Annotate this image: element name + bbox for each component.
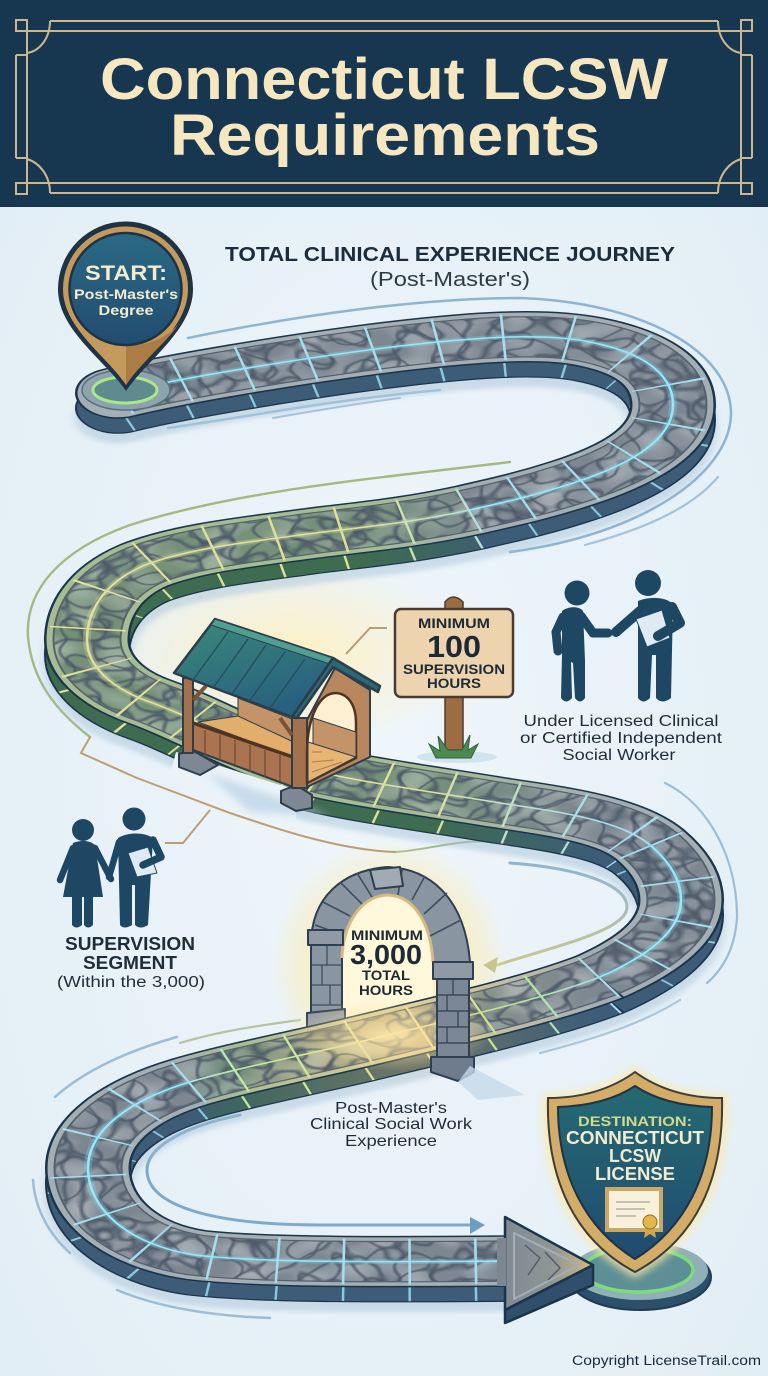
shield label: CONNECTICUT [566, 1128, 704, 1148]
stone arch gate back part [307, 867, 470, 1040]
road ground shadow [87, 361, 681, 1286]
bridge interior [238, 698, 300, 745]
warm glow behind covered bridge [100, 560, 480, 750]
3000 hours label: 3,000 [350, 939, 422, 970]
bridge ground shadow [205, 772, 330, 816]
connector from tan line to figures [165, 810, 210, 843]
3000 hours label: TOTAL [362, 968, 410, 983]
start map pin [58, 221, 193, 391]
supervisor caption: or Certified Independent [520, 730, 723, 747]
supervision hours sign [395, 597, 513, 763]
arch shadow [458, 1066, 525, 1100]
pin label: Post-Master's [74, 286, 178, 302]
glow on road through arch [285, 999, 495, 1071]
chevron pointer towards arch [483, 957, 498, 973]
pin label: Degree [98, 302, 154, 318]
supervisor caption: Social Worker [562, 747, 676, 764]
bridge foundation stones [179, 750, 218, 775]
3000 hours label: MINIMUM [351, 927, 423, 943]
winding road path [87, 337, 681, 1286]
blue direction arrowhead [470, 1217, 485, 1234]
journey heading: (Post-Master's) [370, 269, 530, 291]
header banner [0, 0, 768, 207]
supervision hours sign: HOURS [427, 675, 481, 691]
title [100, 47, 668, 168]
icon: handshake supervisor figures [556, 570, 680, 702]
experience caption: Post-Master's [335, 1100, 447, 1117]
supervision segment caption: SEGMENT [83, 953, 177, 973]
experience caption [310, 1100, 473, 1150]
title: Connecticut LCSW [100, 47, 668, 112]
destination disc [569, 1242, 711, 1310]
icon: clipboard [636, 610, 670, 647]
3000 hours label [350, 927, 423, 998]
start marker disc [82, 370, 170, 410]
experience caption: Experience [345, 1133, 437, 1150]
experience caption: Clinical Social Work [310, 1116, 473, 1133]
road side wall [87, 352, 681, 1277]
shield label: LICENSE [595, 1164, 675, 1184]
sign post [445, 597, 463, 750]
motion lines around the path [28, 298, 737, 1318]
journey heading [225, 244, 676, 291]
supervision hours sign: MINIMUM [418, 615, 490, 631]
supervisor caption [520, 713, 723, 764]
copyright: Copyright LicenseTrail.com [572, 1353, 761, 1368]
journey heading: TOTAL CLINICAL EXPERIENCE JOURNEY [225, 244, 676, 266]
supervision segment caption [57, 934, 205, 991]
supervisor caption: Under Licensed Clinical [524, 713, 718, 730]
pin label: START: [85, 262, 167, 285]
road cobble stones [87, 337, 681, 1262]
road top surface [87, 337, 681, 1262]
grass [429, 735, 478, 758]
title: Requirements [170, 103, 600, 168]
icon: clipboard small [128, 847, 157, 877]
supervision segment caption: (Within the 3,000) [57, 974, 205, 991]
supervision hours sign: SUPERVISION [403, 661, 505, 677]
road cross bars and centre glow [118, 337, 673, 510]
icon: supervision pair figures [60, 808, 161, 928]
supervision segment caption: SUPERVISION [65, 934, 195, 954]
bridge roof [174, 619, 333, 717]
bridge side wall [193, 723, 293, 787]
arch right pillar [431, 962, 474, 1081]
covered bridge [174, 619, 380, 811]
destination shield [542, 1066, 728, 1278]
arrow head at road end [497, 1217, 593, 1323]
supervision hours sign: 100 [427, 629, 481, 664]
pin label [74, 262, 178, 318]
ground patch under bridge [170, 752, 296, 820]
bridge front gable [307, 668, 370, 787]
tan guide line under road [81, 737, 395, 852]
connector from bridge to sign [346, 628, 387, 654]
shield label [566, 1113, 704, 1184]
glow behind arch [272, 840, 508, 1090]
shield label: LCSW [609, 1146, 661, 1166]
3000 hours label: HOURS [359, 983, 413, 998]
shield label: DESTINATION: [578, 1113, 692, 1129]
icon: certificate [605, 1187, 663, 1238]
